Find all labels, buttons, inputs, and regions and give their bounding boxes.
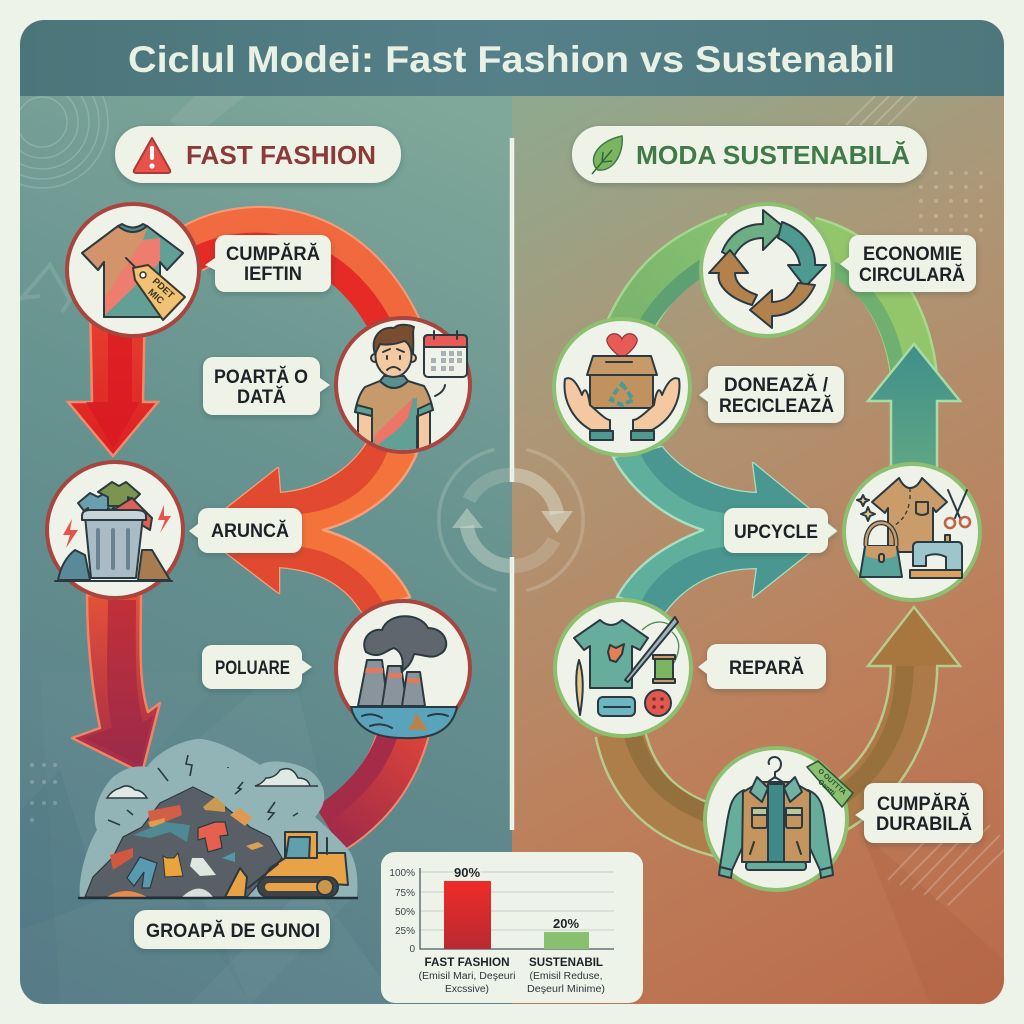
arrow: repara to durabila	[620, 732, 720, 832]
label: poarta o data: DATĂ	[237, 386, 286, 408]
value: 90%: 90%	[454, 865, 480, 880]
arrow: economie to up	[810, 240, 915, 385]
heading: fast fashion: FAST FASHION	[186, 140, 376, 170]
heading: moda sustenabila	[572, 126, 927, 183]
label: poluare: POLUARE	[215, 658, 290, 679]
icon: central cycle watermark	[439, 450, 583, 590]
icon: upcycle circle	[844, 464, 980, 600]
icon: trash bin circle	[47, 462, 183, 598]
arrow: doneaza and repara to upcycle	[613, 447, 836, 612]
icon: landfill with bulldozer	[78, 739, 358, 898]
panel: sustainable background	[512, 90, 1004, 1004]
chart axis labels: 75%	[395, 888, 415, 899]
icon: factory pollution circle	[336, 601, 470, 738]
chart axis labels	[389, 868, 415, 955]
chart label: sustenabil: (Emisil Reduse,	[530, 971, 602, 982]
label: cumpara durabila: DURABILĂ	[876, 813, 972, 835]
icon: person circle	[336, 318, 470, 460]
chart label: fast fashion: Excssive)	[445, 984, 489, 995]
chart axis labels: 50%	[395, 907, 415, 918]
icon: durable jacket circle	[705, 748, 853, 890]
label: groapa de gunoi: GROAPĂ DE GUNOI	[146, 920, 320, 942]
label: cumpara durabila	[855, 783, 983, 843]
label: cumpara durabila: CUMPĂRĂ	[877, 793, 970, 815]
label: doneaza recicleaza	[699, 366, 844, 423]
arrow: poluare to groapa	[322, 720, 407, 830]
label: economie circulara: CIRCULARĂ	[859, 264, 965, 286]
label: poluare	[202, 645, 312, 689]
icon: warning triangle	[134, 138, 170, 173]
chart label: sustenabil	[527, 957, 605, 995]
label: upcycle	[724, 508, 837, 553]
icon: durable jacket circle: O OUTTTA	[816, 768, 847, 797]
label: poarta o data	[203, 357, 330, 415]
label: cumpara ieftin	[205, 235, 331, 292]
heading: fast fashion	[115, 126, 401, 183]
arrow: cumpara to arunca	[68, 300, 158, 456]
chart axis labels: 0	[409, 944, 415, 955]
bar: fast fashion 90%	[444, 881, 491, 949]
icon: repair circle	[555, 600, 691, 736]
arrow: doneaza to economie	[628, 235, 735, 335]
arrow: arunca to groapa	[72, 595, 160, 773]
chart label: sustenabil: Deşeurl Minime)	[527, 984, 605, 995]
label: economie circulara	[840, 235, 976, 292]
panel: bar chart	[381, 852, 643, 1003]
chart label: fast fashion: (Emisil Mari, Deşeuri	[418, 971, 516, 982]
value: 20%: 20%	[553, 916, 579, 931]
label: arunca: ARUNCĂ	[211, 520, 289, 542]
header band	[20, 20, 1004, 96]
bar: sustenabil 20%	[544, 932, 589, 949]
arrow: poarta and poluare to arunca	[198, 443, 417, 612]
icon: recycling loop circle	[701, 204, 833, 336]
icon: donate box circle	[554, 319, 690, 455]
icon: cheap t-shirt circle: PDET	[150, 276, 176, 301]
label: groapa de gunoi	[134, 910, 330, 949]
label: cumpara ieftin: CUMPĂRĂ	[226, 243, 320, 265]
arrow: durabila to upcycle	[835, 607, 960, 810]
chart axis labels: 25%	[395, 926, 415, 937]
label: doneaza recicleaza: RECICLEAZĂ	[719, 395, 834, 417]
arrow: cumpara to poarta	[190, 231, 398, 335]
label: repara: REPARĂ	[729, 657, 804, 679]
chart label: sustenabil: SUSTENABIL	[529, 957, 603, 969]
center divider	[510, 138, 514, 830]
icon: cheap t-shirt circle: MIC	[145, 287, 166, 307]
title: Ciclul Modei: Fast Fashion vs Sustenabil	[128, 39, 895, 80]
chart label: fast fashion	[418, 957, 516, 995]
label: upcycle: UPCYCLE	[734, 522, 818, 543]
label: economie circulara: ECONOMIE	[863, 244, 962, 265]
icon: cheap t-shirt circle	[67, 204, 199, 336]
chart label: fast fashion: FAST FASHION	[424, 957, 510, 969]
icon: leaf	[592, 136, 622, 174]
heading: moda sustenabila: MODA SUSTENABILĂ	[636, 140, 910, 170]
chart axis labels: 100%	[389, 868, 415, 879]
icon: durable jacket circle: Oantti	[816, 779, 836, 797]
arrow: upcycle to economie	[868, 344, 960, 475]
panel: fast fashion background	[20, 90, 512, 1004]
label: arunca	[189, 508, 302, 553]
label: repara	[698, 644, 826, 689]
label: cumpara ieftin: IEFTIN	[244, 264, 302, 285]
label: poarta o data: POARTĂ O	[214, 366, 308, 388]
label: doneaza recicleaza: DONEAZĂ /	[724, 374, 829, 396]
